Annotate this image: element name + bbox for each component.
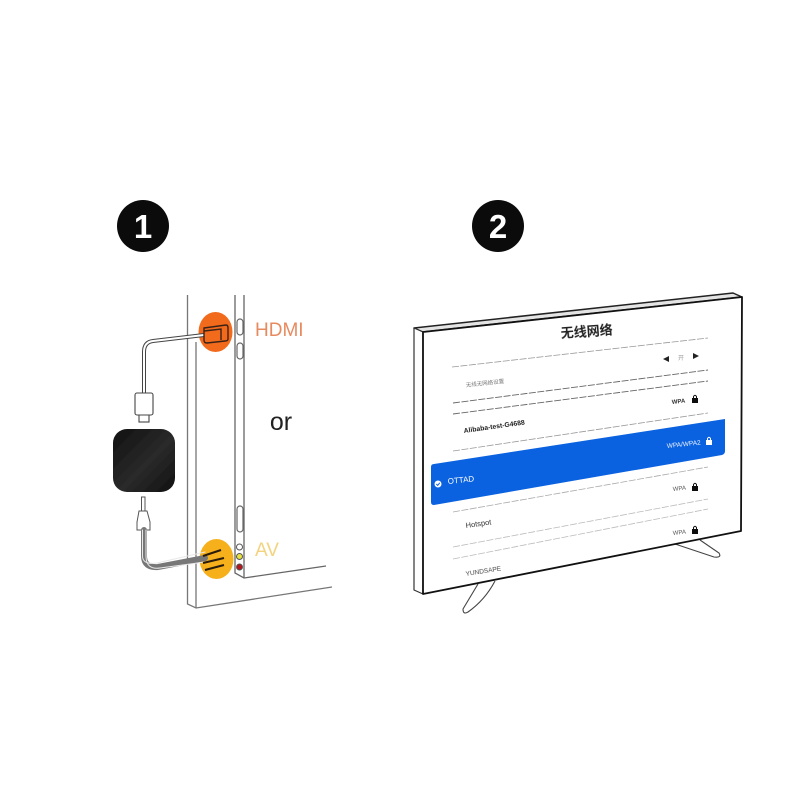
wireless toggle row: 无线无网络设置 bbox=[465, 377, 505, 389]
tv stand legs bbox=[463, 540, 720, 613]
step 1 badge: 1 bbox=[134, 208, 152, 245]
wireless toggle row: 开 bbox=[678, 355, 684, 362]
tv side ports bbox=[236, 319, 243, 570]
HDMI plug bbox=[135, 393, 153, 422]
network row: Alibaba-test bbox=[463, 395, 698, 435]
RCA plugs bbox=[203, 550, 224, 570]
network row: Hotspot bbox=[465, 517, 698, 537]
network row: Alibaba-test: WPA bbox=[672, 399, 686, 406]
HDMI connector in port bbox=[204, 325, 228, 343]
step 2 badge: 2 bbox=[489, 208, 507, 245]
HDMI cable bbox=[144, 335, 204, 394]
network row: YUNDSAPE: YUNDSAPE bbox=[465, 565, 502, 578]
AV label: AV bbox=[255, 540, 279, 561]
or label: or bbox=[270, 408, 292, 436]
HDMI label: HDMI bbox=[255, 320, 304, 341]
network row: Hotspot: Hotspot bbox=[465, 517, 493, 530]
network row: OTTAD selected: WPA/WPA2 bbox=[666, 439, 701, 450]
step 2 badge bbox=[472, 200, 524, 252]
AV cable bbox=[142, 530, 205, 568]
panel: connection diagram bbox=[113, 295, 332, 608]
network row: OTTAD selected: OTTAD bbox=[447, 474, 475, 486]
network row: Alibaba-test: Alibaba-test-G4688 bbox=[463, 419, 525, 435]
network row: OTTAD selected bbox=[434, 437, 712, 488]
network row: Hotspot: WPA bbox=[673, 530, 686, 537]
menu title: 无线网络 bbox=[560, 322, 613, 341]
selected wifi row bbox=[431, 419, 725, 505]
step 1 badge bbox=[117, 200, 169, 252]
tv frame bbox=[414, 293, 742, 594]
panel: television with wifi menu bbox=[414, 293, 742, 613]
tv side panel outline bbox=[235, 295, 326, 578]
orange HDMI port highlight bbox=[198, 312, 232, 352]
network row: WPA lock bbox=[673, 483, 698, 493]
AV connector bbox=[137, 497, 150, 530]
wireless toggle row bbox=[465, 353, 699, 389]
yellow AV port highlight bbox=[200, 539, 234, 579]
network row: WPA lock: WPA bbox=[673, 486, 686, 493]
menu dividers bbox=[452, 338, 708, 559]
streaming box bbox=[113, 429, 175, 492]
wall outline bbox=[188, 295, 332, 608]
